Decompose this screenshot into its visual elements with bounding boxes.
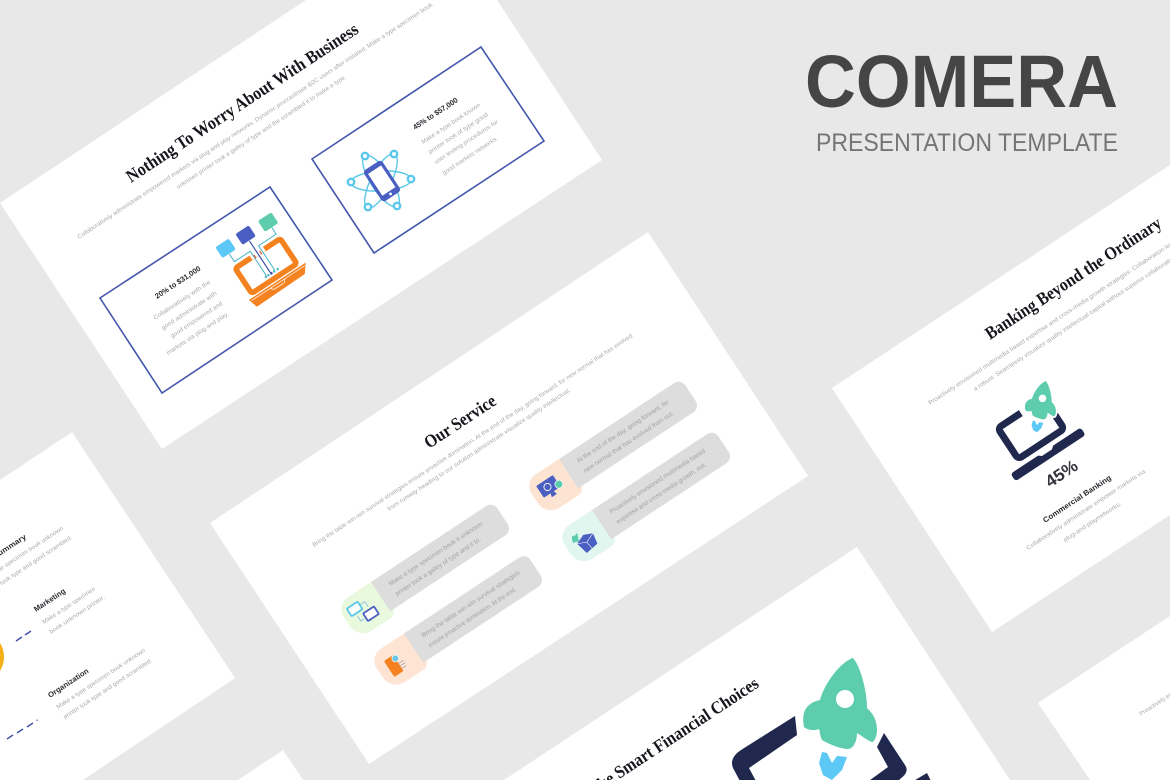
icon: large laptop with rocket [732,658,932,780]
text block: 20% to $31,000: markets via plug and play. [166,311,230,357]
card: 20% to $31,000 [100,187,332,393]
text block: marketing: Make a type specimen [42,587,97,626]
text block: 45% to $57,000 [411,96,500,177]
icon: blue monitor with badge [536,473,566,501]
heading: our service: Our Service [420,391,500,452]
text block: 20% to $31,000: Collaboratively with the [153,279,213,322]
text block: marketing: Marketing [32,586,67,614]
service item: monitor [524,379,703,516]
text block: organization [46,648,154,721]
icon: phone with orbiting nodes [348,150,414,212]
text block: slide intro: unknown printer took a galley of type and the scrambled it to make a type. [176,74,348,191]
text block: organization: Make a type specimen book unknown [56,648,147,711]
connector: organization dashes [7,720,38,739]
stat: 45%: 45% [1042,456,1081,491]
service item: mobile: Bring the table win-win survival strategies [421,569,521,639]
service item: devices [336,502,515,639]
text block: 45% to $57,000: good markets networks. [442,136,500,177]
panel: bottom right slide [1038,616,1170,780]
text block: service intro: from runway heading to our solution administrate visualize quality intellectual. [387,387,572,513]
text block: marketing [32,586,107,636]
icon: laptop with rocket [986,381,1086,481]
text block: 45% to $57,000: user testing procedures for [434,119,500,166]
service item: launch box: Proactively envisioned multimedia based [609,447,707,516]
service item: devices: Make a type specimen book it unknown [388,520,485,588]
title: comera: COMERA [805,40,1118,123]
service item: mobile: ensure proactive domination. At the end. [427,586,518,649]
service item: launch box: expertise and cross-media growth. out. [615,461,708,526]
text block: 45% to $57,000: printer took of type good [428,112,490,156]
service item: monitor: new normal that has evolved from out. [582,410,676,475]
service item: launch box [557,430,736,567]
service item: mobile [369,553,548,691]
panel: small slide corner [238,750,303,780]
panel: nothing to worry slide [0,0,602,449]
heading: nothing to worry: Nothing To Worry About With Business [122,19,362,186]
text block: slide intro: Collaboratively administrate empowered markets via plug and play networks. Dynamic procrastinate B2C users after installed. Make a type specimen book [77,2,435,241]
text block: organization: Organization [46,666,91,700]
icon: orange device [384,652,409,677]
text block: 45% to $57,000: 45% to $57,000 [411,96,460,132]
text block: marketing: book unknown printer. [49,595,107,636]
subtitle: presentation template: PRESENTATION TEMPLATE [816,129,1118,157]
service item: monitor: At the end of the day, going forward, for [576,398,671,465]
icon: yellow circle [0,630,4,684]
service item: devices: printer took a galley of type and it to. [394,536,483,598]
icon: orange laptop with network boxes [215,210,311,308]
icon: connected devices [347,596,379,627]
text block: 20% to $31,000 [153,264,230,357]
text block: 45% to $57,000: Make a type book known [421,103,482,146]
connector: marketing dashes [16,631,31,641]
panel: our service slide [210,232,808,764]
text block: commercial banking: Commercial Banking [1041,473,1113,525]
text block: commercial banking: Collaboratively administrate empower markets via [1026,469,1147,552]
text block: commercial banking: plug-and-playnetworks. [1063,501,1123,544]
text block: organization: printer took type and good scrambled. [63,658,154,721]
icon: rocket in box [570,526,600,556]
text block: banking intro: Proactively envisioned multimedia based expertise and cross-media growth strategies. Collaboration level [928,239,1170,407]
panel: banking slide [832,165,1170,632]
card: 45% to $57,000 [312,47,544,253]
text block: 20% to $31,000: good administrate with [161,291,218,332]
text block: 20% to $31,000: 20% to $31,000 [153,264,202,301]
panel: summary slide [0,432,235,780]
text block: service intro: Bring the table win-win survival strategies ensure proactive domination. At the end of the day, going forward, for new normal that has evolved [312,333,634,549]
text block: banking intro: a robust. Seamlessly visualize quality intellectual capital without superior collaborative at [973,251,1170,393]
panel: smart financial choices slide [504,547,1010,780]
text block: 20% to $31,000: good empowered and [170,301,224,340]
